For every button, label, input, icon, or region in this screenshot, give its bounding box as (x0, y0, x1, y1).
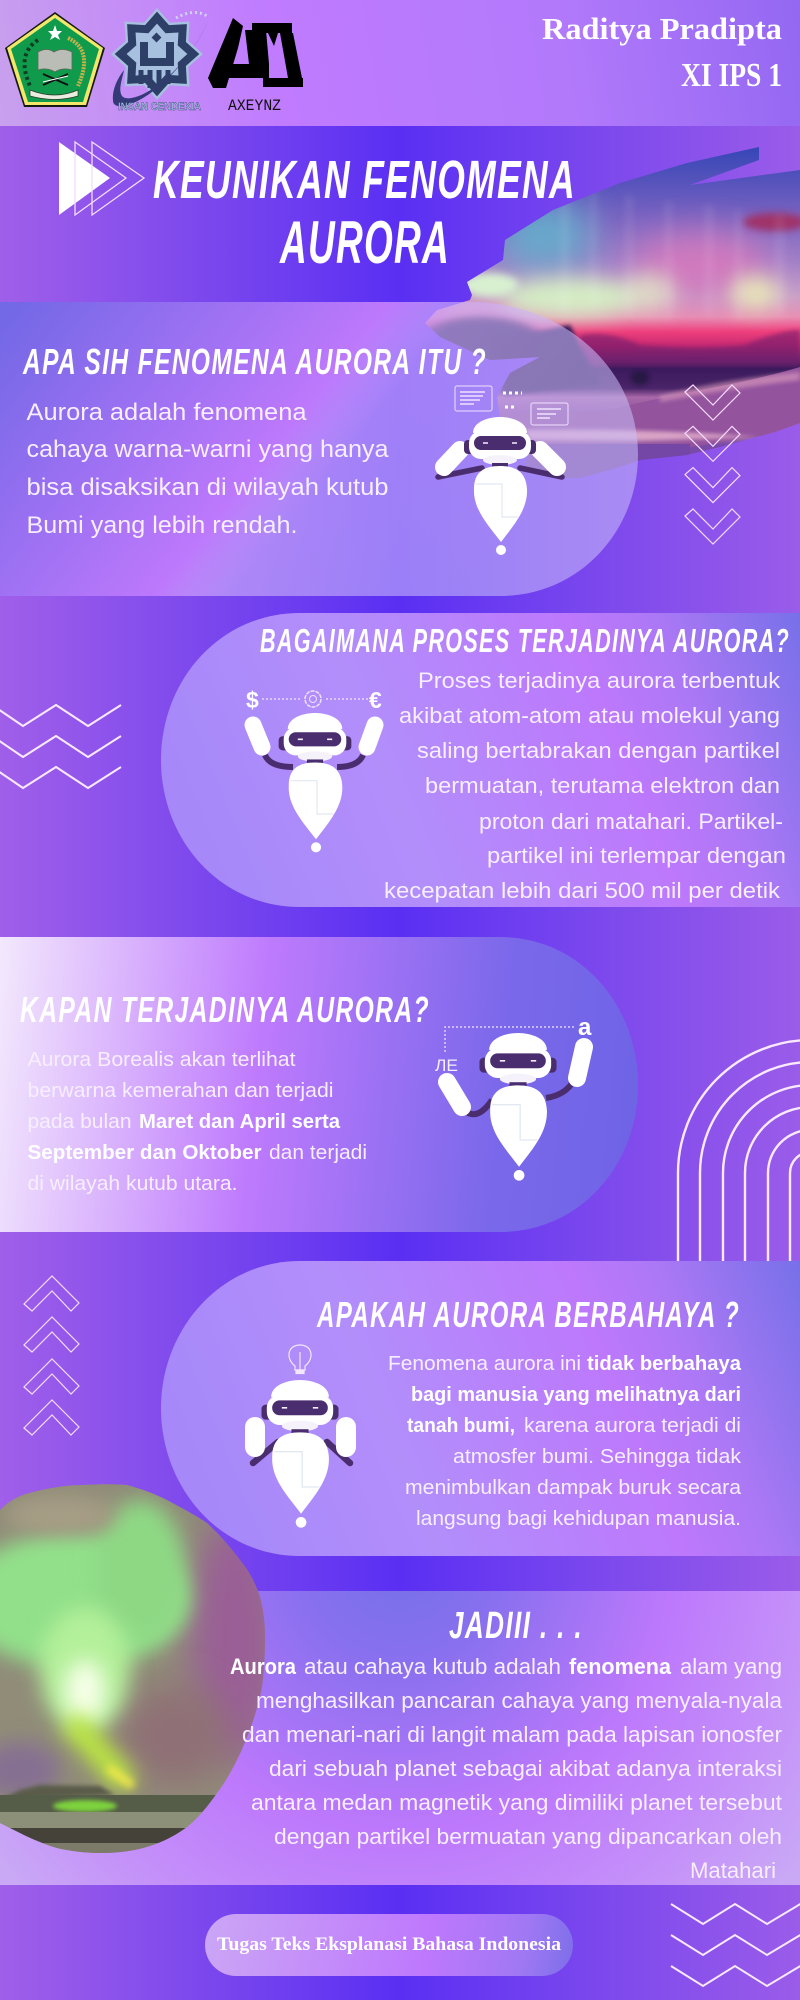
chevrons: up (24, 1276, 79, 1435)
icon: chat documents (455, 386, 568, 425)
arcs decoration (678, 1040, 800, 1262)
body text: September dan Oktober (28, 1142, 262, 1164)
body text: akibat atom-atom atau molekul yang (399, 703, 780, 728)
body text (28, 1049, 367, 1195)
body text: dari sebuah planet sebagai akibat adanya interaksi (269, 1756, 782, 1781)
author name: Raditya Pradipta (542, 11, 783, 46)
logo: Axeynz (208, 18, 303, 115)
logo: Kementerian Agama emblem (5, 12, 105, 107)
title: AURORA (279, 209, 450, 276)
panel: jadiii text (230, 1605, 783, 1883)
title (153, 150, 576, 276)
body text: Aurora (230, 1654, 297, 1679)
body text: fenomena (569, 1654, 672, 1679)
panel: bagaimana proses (161, 613, 800, 907)
robot: arms raised (253, 713, 375, 852)
panel: jadiii conclusion background (0, 1591, 800, 1885)
body text: Maret dan April serta (139, 1111, 341, 1133)
chevrons: down (685, 385, 740, 544)
body text: dengan partikel bermuatan yang dipancarkan oleh (274, 1824, 782, 1849)
photo: aurora over snowy landscape (415, 140, 800, 485)
icon: currency exchange: € (369, 687, 382, 713)
body text: saling bertabrakan dengan partikel (417, 738, 780, 763)
body text (388, 1353, 742, 1530)
logo: Insan Cendekia (111, 8, 208, 113)
panel: apa sih fenomena aurora (0, 302, 638, 596)
icon: translation: ЛE (435, 1056, 458, 1075)
body text: bisa disaksikan di wilayah kutub (26, 474, 389, 501)
body text: proton dari matahari. Partikel- (479, 809, 783, 834)
robot: hands on head (438, 417, 562, 555)
title: KEUNIKAN FENOMENA (153, 150, 576, 210)
body text: karena aurora terjadi di (524, 1415, 741, 1437)
logo: Axeynz: AXEYNZ (228, 97, 281, 115)
body text: atau cahaya kutub adalah (304, 1654, 561, 1679)
body text: Aurora Borealis akan terlihat (28, 1049, 296, 1071)
body text: alam yang (680, 1654, 782, 1679)
body text: Proses terjadinya aurora terbentuk (418, 668, 781, 693)
body text: Fenomena aurora ini (388, 1353, 581, 1375)
zigzag decoration left (0, 705, 121, 788)
footer pill: Tugas Teks Eksplanasi Bahasa Indonesia (217, 1934, 562, 1955)
body text: langsung bagi kehidupan manusia. (416, 1508, 741, 1530)
body text: menimbulkan dampak buruk secara (405, 1477, 742, 1499)
body text: Bumi yang lebih rendah. (26, 512, 298, 539)
body text: menghasilkan pancaran cahaya yang menyala-nyala (256, 1688, 783, 1713)
icon: lightbulb (289, 1345, 311, 1374)
body text (26, 399, 389, 539)
body text: bagi manusia yang melihatnya dari (411, 1384, 741, 1406)
robot: waving (447, 1033, 584, 1181)
body text: dan terjadi (269, 1142, 367, 1164)
body text (384, 668, 786, 903)
icon: currency exchange: $ (246, 687, 259, 713)
body text: pada bulan (28, 1111, 132, 1133)
body text: kecepatan lebih dari 500 mil per detik (384, 878, 781, 903)
body text: atmosfer bumi. Sehingga tidak (453, 1446, 742, 1468)
body text: partikel ini terlempar dengan (487, 843, 786, 868)
heading: JADIII . . . (449, 1605, 583, 1647)
robot: thinking (253, 1380, 350, 1528)
body text: bermuatan, terutama elektron dan (425, 773, 780, 798)
header band (0, 0, 800, 126)
heading: APA SIH FENOMENA AURORA ITU ? (22, 341, 487, 382)
body text: dan menari-nari di langit malam pada lapisan ionosfer (242, 1722, 782, 1747)
logo: Insan Cendekia: INSAN CENDEKIA (118, 101, 201, 113)
heading: KAPAN TERJADINYA AURORA? (20, 989, 430, 1030)
photo: green aurora (0, 1480, 280, 1860)
body text: antara medan magnetik yang dimiliki planet tersebut (251, 1790, 782, 1815)
panel: kapan terjadinya (0, 937, 638, 1232)
footer pill (205, 1914, 573, 1976)
body text: tidak berbahaya (587, 1353, 742, 1375)
body text: di wilayah kutub utara. (28, 1173, 238, 1195)
panel: apakah aurora berbahaya (161, 1261, 800, 1556)
body text: cahaya warna-warni yang hanya (26, 436, 389, 463)
title arrow icon (59, 142, 144, 215)
body text: Aurora adalah fenomena (26, 399, 307, 426)
icon: currency exchange (246, 687, 382, 713)
body text (230, 1654, 783, 1883)
body text: Matahari (690, 1858, 776, 1883)
body text: berwarna kemerahan dan terjadi (28, 1080, 334, 1102)
zigzag decoration bottom right (671, 1903, 800, 1986)
icon: translation (435, 1014, 592, 1075)
icon: translation: a (578, 1014, 592, 1041)
body text: tanah bumi, (407, 1415, 515, 1437)
